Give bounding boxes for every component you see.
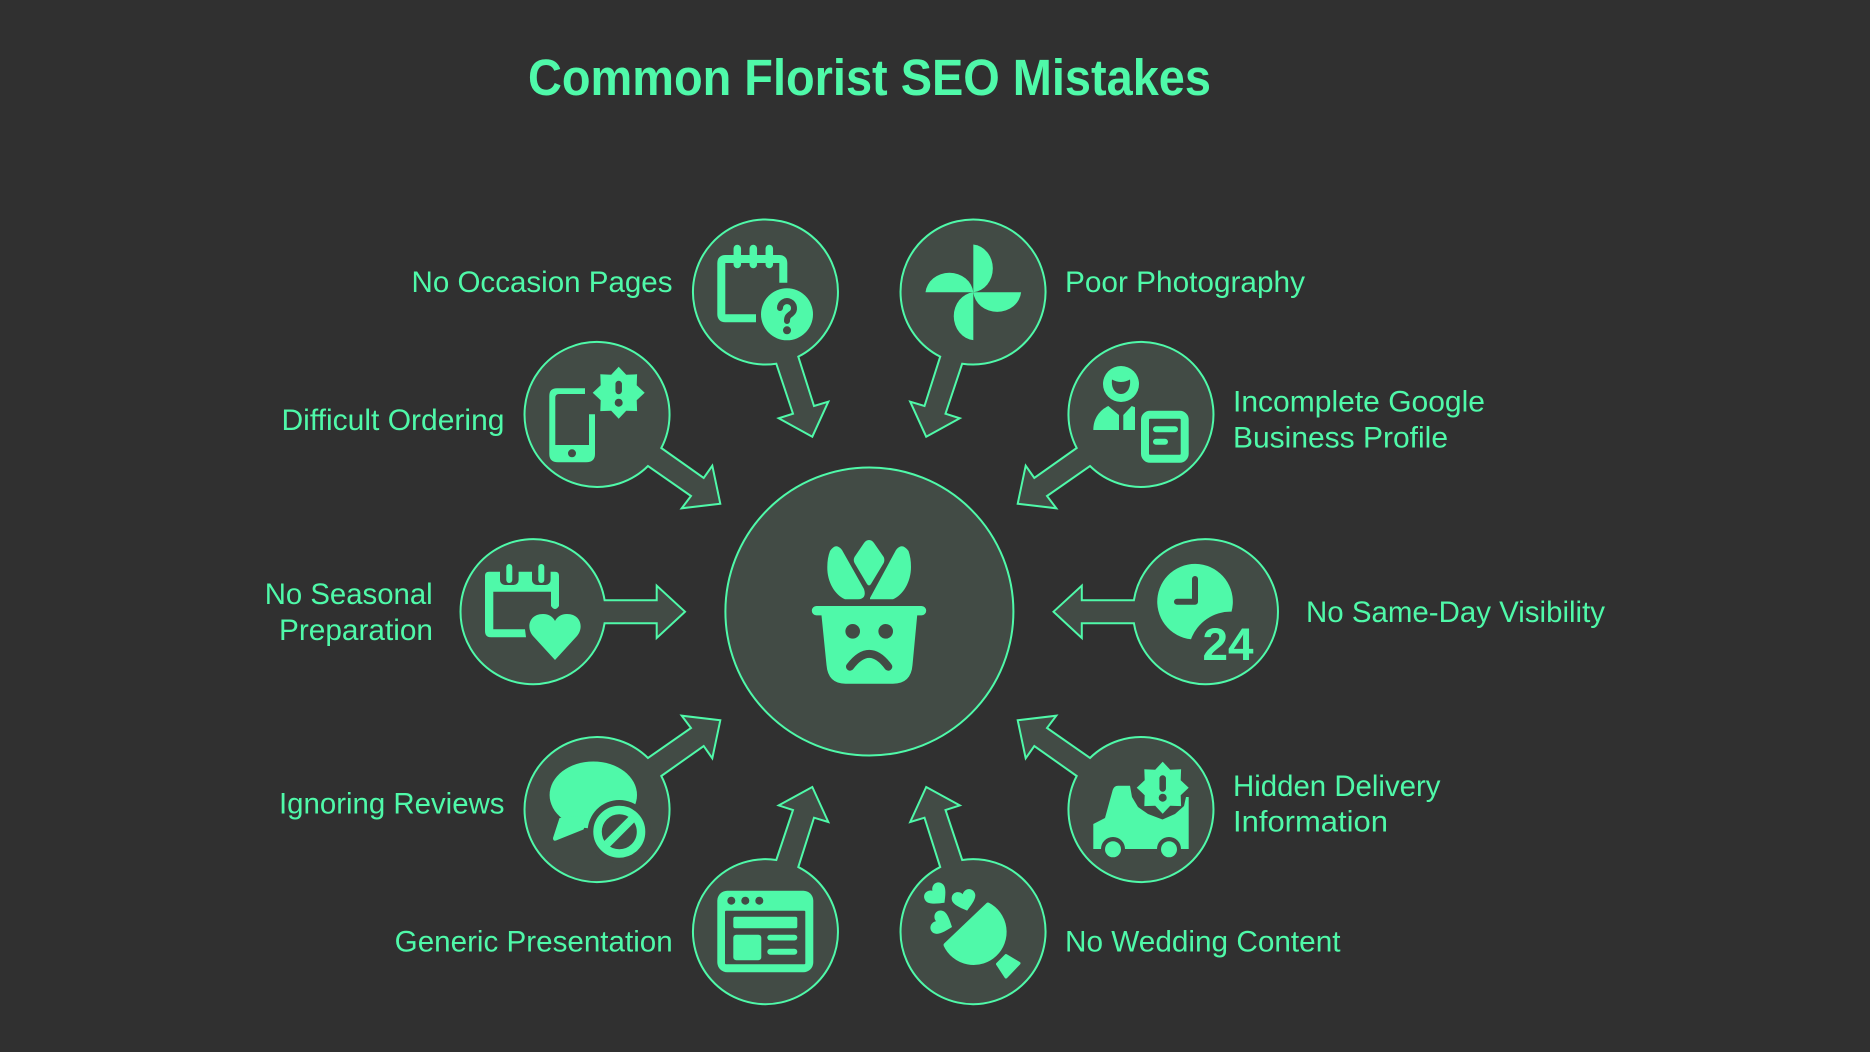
- icon: calendar with question mark: [721, 248, 813, 340]
- icon: delivery van with alert badge: [1093, 762, 1189, 857]
- label: Generic Presentation: [395, 926, 673, 958]
- node with arrow: [525, 342, 720, 508]
- icon: 24 hour clock: 24: [1202, 619, 1254, 670]
- label: Incomplete Google: [1233, 386, 1485, 419]
- node with arrow: [901, 220, 1046, 437]
- label: Hidden Delivery: [1233, 770, 1441, 803]
- icon: person with document: [1093, 366, 1185, 459]
- item: Incomplete Google Business Profile: [1018, 342, 1485, 508]
- icon: browser window: [717, 891, 813, 972]
- icon: 24 hour clock: [1157, 564, 1254, 670]
- node with arrow: [525, 716, 720, 882]
- label: Difficult Ordering: [282, 404, 504, 437]
- node with arrow: [461, 539, 685, 684]
- icon: chat bubble with ban sign: [550, 762, 651, 863]
- node with arrow: [693, 220, 838, 437]
- item: Hidden Delivery Information: [1018, 716, 1441, 882]
- node with arrow: [1018, 716, 1213, 882]
- node with arrow: [693, 787, 838, 1004]
- label: No Same-Day Visibility: [1306, 596, 1605, 629]
- icon: calendar with heart: [485, 564, 581, 660]
- item: Difficult Ordering: [282, 342, 720, 508]
- label: Poor Photography: [1065, 266, 1305, 299]
- item: Ignoring Reviews: [279, 716, 720, 882]
- node with arrow: [1018, 342, 1213, 508]
- central hub: sad plant pot: [725, 468, 1013, 756]
- label: No Wedding Content: [1065, 926, 1340, 958]
- label: Preparation: [279, 614, 433, 647]
- label: No Seasonal: [265, 578, 433, 611]
- icon: phone with alert badge: [549, 367, 645, 462]
- label: No Occasion Pages: [412, 266, 672, 299]
- node with arrow: [901, 787, 1046, 1004]
- item: No Same-Day Visibility: [1054, 539, 1605, 684]
- icon: pinwheel: [926, 244, 1021, 340]
- node with arrow: [1054, 539, 1278, 684]
- label: Business Profile: [1233, 422, 1448, 455]
- item: Poor Photography: [901, 220, 1305, 437]
- label: Ignoring Reviews: [279, 788, 504, 820]
- label: Information: [1233, 806, 1388, 839]
- title: Common Florist SEO Mistakes: [528, 49, 1211, 106]
- icon: wedding bouquet with hearts: [921, 880, 1019, 977]
- item: No Occasion Pages: [412, 220, 838, 437]
- item: No Wedding Content: [901, 787, 1340, 1004]
- icon: sad flower pot: [812, 540, 926, 684]
- item: Generic Presentation: [395, 787, 838, 1004]
- item: No Seasonal Preparation: [265, 539, 685, 684]
